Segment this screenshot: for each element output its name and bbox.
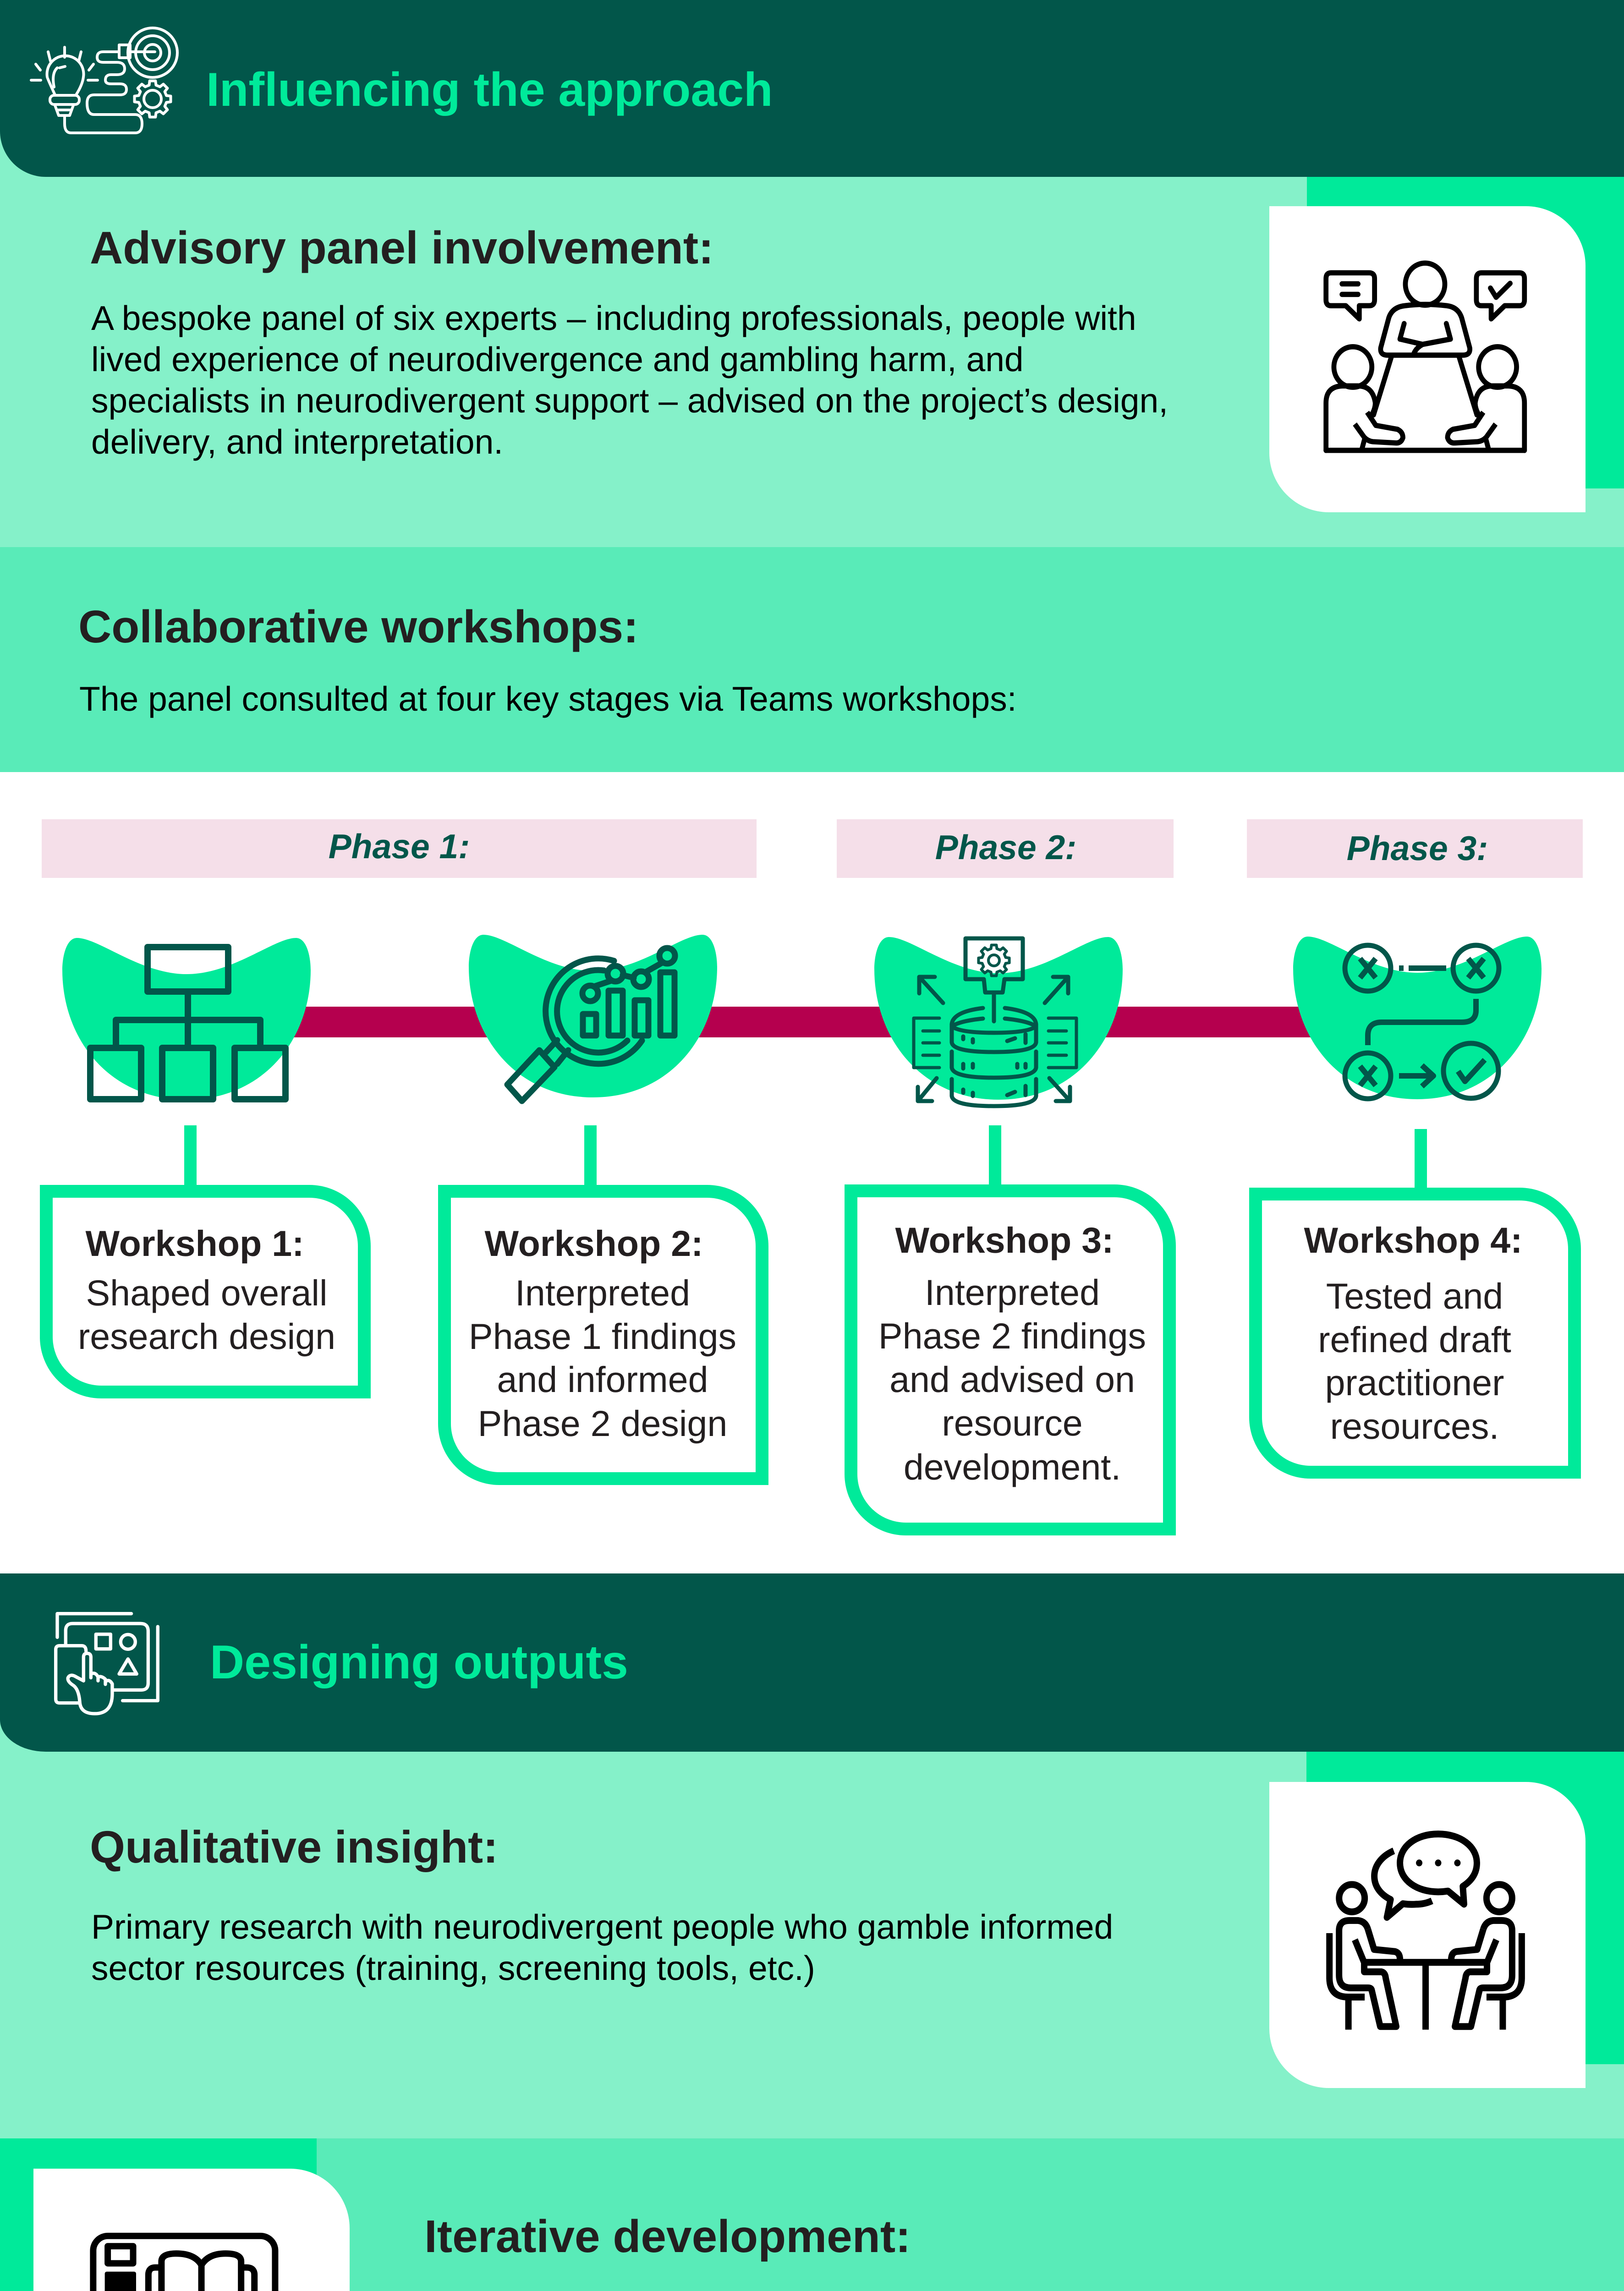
qualitative heading: Qualitative insight: (90, 1821, 498, 1872)
workshop 1 callout: Shaped overall (86, 1272, 328, 1313)
timeline bar (284, 1007, 1320, 1037)
workshop 1 node icon: hierarchy (62, 938, 311, 1100)
workshop 2 callout: Workshop 2: (485, 1223, 703, 1264)
workshop 2 node icon: magnifier and chart (469, 935, 717, 1101)
workshop 3 callout: Phase 2 findings (878, 1315, 1146, 1356)
phase label: Phase 2: Phase 2: (935, 828, 1076, 866)
workshop 4 callout: refined draft (1318, 1319, 1511, 1360)
workshop 1 callout: research design (78, 1316, 335, 1357)
workshop 2 callout (444, 1125, 762, 1479)
workshop 3 node icon: database and arrows (874, 937, 1123, 1106)
advisory body text: delivery, and interpretation. (91, 422, 503, 461)
advisory body text (91, 299, 1168, 461)
advisory body text: lived experience of neurodivergence and gambling harm, and (91, 340, 1024, 378)
advisory body text: specialists in neurodivergent support – advised on the project’s design, (91, 381, 1168, 420)
header bar: designing outputs (0, 1573, 1624, 1752)
phase label: Phase 1: Phase 1: (329, 827, 470, 866)
icon card: two people talking (1269, 1752, 1624, 2088)
panel: advisory panel involvement (0, 128, 1624, 547)
workshop 4 callout (1256, 1129, 1575, 1472)
workshop 4 callout: Workshop 4: (1304, 1220, 1522, 1261)
workshop 1 callout: Workshop 1: (86, 1223, 304, 1264)
workshop 4 node icon: decision path (1293, 937, 1542, 1099)
qualitative body text (91, 1907, 1113, 1987)
icon card: advisory meeting (1269, 176, 1624, 512)
qualitative body text: sector resources (training, screening tools, etc.) (91, 1949, 815, 1987)
workshop 1 callout (46, 1125, 364, 1392)
section title: Designing outputs (210, 1636, 628, 1689)
workshop 3 callout: resource (942, 1403, 1083, 1443)
iterative heading: Iterative development: (424, 2211, 911, 2262)
phase label: Phase 3: Phase 3: (1347, 829, 1488, 867)
workshops heading: Collaborative workshops: (78, 601, 638, 652)
workshop 3 callout: Interpreted (925, 1272, 1100, 1313)
icon: bulb to target journey (31, 28, 177, 133)
workshop 3 callout: and advised on (889, 1359, 1135, 1400)
phase label: Phase 1 (42, 819, 757, 878)
qualitative body text: Primary research with neurodivergent people who gamble informed (91, 1907, 1113, 1946)
icon: hand touching screen (56, 1614, 158, 1714)
workshop 3 callout (851, 1125, 1169, 1529)
advisory heading: Advisory panel involvement: (90, 222, 713, 274)
workshop 2 callout: Phase 1 findings (469, 1316, 736, 1357)
phase label: Phase 3 (1247, 819, 1583, 878)
header bar: influencing the approach (0, 0, 1624, 177)
icon card: online book resource (0, 2138, 350, 2291)
advisory body text: A bespoke panel of six experts – including professionals, people with (91, 299, 1136, 337)
panel: iterative development (0, 2138, 1624, 2291)
workshop 2 callout: and informed (497, 1359, 708, 1400)
section title: Influencing the approach (206, 63, 773, 116)
panel: collaborative workshops (0, 547, 1624, 772)
panel: qualitative insight (0, 1695, 1624, 2138)
workshop 4 callout: practitioner (1325, 1362, 1504, 1403)
workshop 4 callout: Tested and (1326, 1276, 1503, 1316)
workshop 2 callout: Phase 2 design (478, 1403, 727, 1444)
workshop 3 callout: Workshop 3: (895, 1220, 1114, 1261)
workshop 3 callout: development. (904, 1447, 1121, 1487)
workshops intro text: The panel consulted at four key stages via Teams workshops: (79, 680, 1017, 718)
phase label: Phase 2 (837, 819, 1174, 878)
workshop 2 callout: Interpreted (515, 1272, 690, 1313)
workshop 4 callout: resources. (1330, 1406, 1499, 1447)
